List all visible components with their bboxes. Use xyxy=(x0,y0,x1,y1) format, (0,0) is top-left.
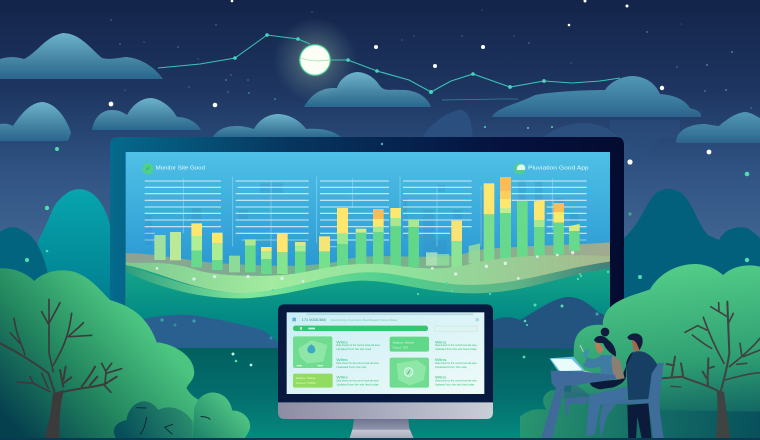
left small bush light xyxy=(193,393,250,440)
bar chart xyxy=(154,177,580,275)
chair xyxy=(599,363,664,440)
woman xyxy=(580,328,627,437)
screen teal ribbon wave xyxy=(126,262,610,298)
screen lower wave fill xyxy=(126,262,610,342)
screen dots on waves xyxy=(156,251,574,283)
cloud: far right xyxy=(676,112,760,143)
small screen stat card bottom left: Good 7008 xyxy=(296,381,316,385)
small screen stat card top right xyxy=(390,337,429,352)
large monitor xyxy=(110,137,624,349)
moon xyxy=(299,44,331,76)
screen hill: centre left xyxy=(125,315,282,348)
hill: teal left xyxy=(38,189,112,320)
line chart over the sky xyxy=(158,33,620,100)
bright stars xyxy=(109,0,711,165)
small screen text blocks: Updated from the site xyxy=(336,365,367,369)
cloud: left middle xyxy=(0,102,71,141)
small screen text blocks: Wlins xyxy=(336,340,348,344)
small screen top bar: Monitoring Overview Dashboard Panel Data xyxy=(331,318,397,322)
small screen text blocks: Updated from the site feed xyxy=(336,347,372,351)
right tree xyxy=(661,302,760,440)
green stars xyxy=(25,126,749,366)
small screen text blocks: Updated from the site xyxy=(435,365,467,369)
small screen text blocks: Data shown for the current local site area xyxy=(435,361,477,365)
screen right heading xyxy=(514,163,589,174)
small screen text blocks: Wlins xyxy=(435,376,447,380)
monitor bezel xyxy=(110,137,624,330)
right low bush xyxy=(520,390,760,440)
small screen text blocks: Data shown for the current local site area xyxy=(336,343,380,347)
screen left heading xyxy=(142,163,205,174)
small monitor screen xyxy=(287,312,484,394)
cloud: centre left xyxy=(92,98,201,130)
small screen stat card bottom left xyxy=(293,374,333,388)
small screen map card right xyxy=(390,358,429,388)
monitor screen xyxy=(126,152,610,342)
man xyxy=(590,333,657,440)
screen right heading: Pluviation Good App xyxy=(528,165,589,171)
left main bush xyxy=(0,268,199,440)
small screen top bar xyxy=(292,314,479,322)
small screen text blocks: Updated from the site feed today xyxy=(435,347,477,351)
small screen map card left xyxy=(293,336,332,368)
small screen text blocks xyxy=(336,340,477,387)
moon glow xyxy=(273,18,357,102)
small screen stat card top right: Good 700 xyxy=(392,346,409,350)
left bush with tree xyxy=(0,268,250,440)
left tree xyxy=(0,299,122,440)
faint distant stars xyxy=(110,10,752,109)
small screen stat card bottom left: Status Value xyxy=(296,376,316,380)
small monitor stand xyxy=(349,419,414,440)
screen grid lines xyxy=(145,181,587,247)
screen left heading: Monitor Site Good xyxy=(156,165,205,171)
small screen text blocks: Wlins xyxy=(435,340,447,344)
right bush with tree and people xyxy=(520,264,760,440)
small screen text blocks: Data shown for the current local site area xyxy=(435,343,477,347)
screen vertical lines xyxy=(183,177,552,247)
small monitor chin xyxy=(278,402,493,419)
small screen text blocks: Updated from the site feed today xyxy=(435,383,475,387)
cloud: large right xyxy=(492,76,701,117)
bottom edge xyxy=(0,438,760,440)
small screen text blocks: Updated from the site feed today xyxy=(336,383,379,387)
hill: dark teal right xyxy=(624,189,760,300)
screen green ribbon wave xyxy=(126,255,610,293)
left small bush dark xyxy=(114,401,193,440)
ground xyxy=(0,348,760,440)
screen hill: centre right xyxy=(490,297,611,349)
small screen top bar: 171 5008.588 xyxy=(302,318,326,322)
people at desk xyxy=(541,328,664,440)
webcam dot xyxy=(381,143,383,145)
cloud: upper left xyxy=(0,33,163,79)
screen city silhouettes xyxy=(145,180,578,220)
small screen text blocks: Data shown for the current local site area xyxy=(336,361,379,365)
small screen green search bar xyxy=(293,326,428,331)
hills behind the monitor on the right xyxy=(420,110,680,170)
screen back wave xyxy=(126,242,610,306)
hill: dark teal left xyxy=(0,227,52,300)
cloud: near moon xyxy=(304,72,431,107)
small screen text blocks: Wlins xyxy=(336,358,348,362)
laptop xyxy=(549,357,595,374)
small screen text blocks: Data shown for the current local site area xyxy=(435,379,477,383)
right main bush xyxy=(567,264,760,440)
small monitor xyxy=(278,304,493,440)
desk xyxy=(541,371,616,440)
small monitor bezel xyxy=(278,304,493,402)
small screen text blocks: Wlins xyxy=(336,376,348,380)
small screen stat card top right: Status Value xyxy=(392,341,415,345)
small screen text blocks: Data shown for the current local site area xyxy=(336,379,379,383)
cloud: behind monitor top xyxy=(212,114,342,138)
small screen input field xyxy=(434,326,478,331)
small screen text blocks: Wlins xyxy=(435,358,447,362)
bush leaf marks xyxy=(137,408,210,434)
